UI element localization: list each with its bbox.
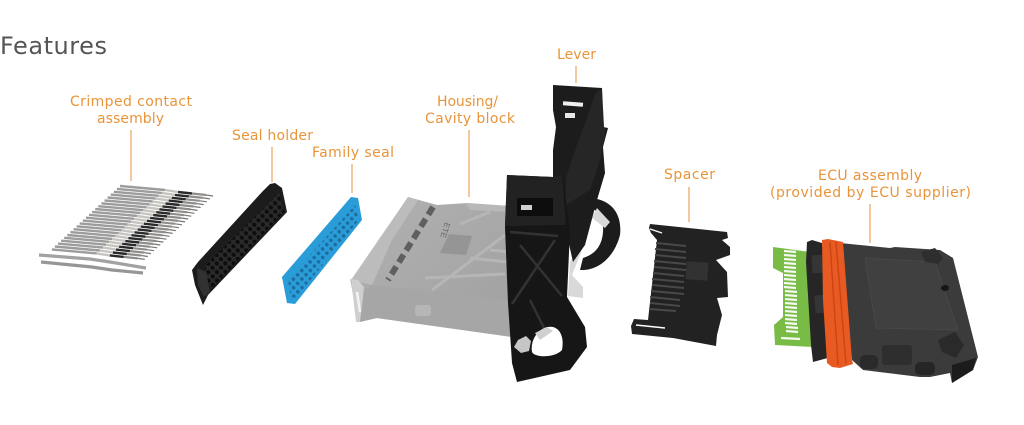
ecu orange seal xyxy=(822,239,853,368)
label: crimped contact assembly: Crimped contact xyxy=(70,94,192,110)
label: housing / cavity block: Housing/ xyxy=(437,94,498,110)
ecu collar xyxy=(806,240,835,362)
label: ecu assembly: ECU assembly xyxy=(818,168,922,184)
lever front plate xyxy=(505,175,587,382)
label: spacer xyxy=(664,167,715,222)
label: lever xyxy=(557,47,596,83)
label: housing / cavity block: Cavity block xyxy=(425,111,516,127)
lever metal latch xyxy=(568,208,610,298)
label: crimped contact assembly: assembly xyxy=(97,111,164,127)
label: lever: Lever xyxy=(557,47,596,63)
label: crimped contact assembly xyxy=(70,94,192,181)
component: housing / cavity block xyxy=(350,197,512,337)
component: housing / cavity block: ETE xyxy=(438,221,452,239)
label: seal holder xyxy=(232,128,313,182)
label: family seal xyxy=(312,145,394,193)
component: seal holder xyxy=(192,183,287,305)
component: crimped contact assembly xyxy=(39,186,213,273)
label: seal holder: Seal holder xyxy=(232,128,313,144)
label: housing / cavity block xyxy=(425,94,516,197)
label: family seal: Family seal xyxy=(312,145,394,161)
label: ecu assembly xyxy=(770,168,971,243)
label: spacer: Spacer xyxy=(664,167,715,183)
lever upper ring xyxy=(580,199,620,270)
ecu body xyxy=(840,243,978,383)
component: ecu assembly xyxy=(773,239,978,383)
title: Features xyxy=(0,32,107,60)
lever upper arm xyxy=(553,85,608,262)
ecu pcb xyxy=(773,247,813,347)
lever lower ring opening xyxy=(532,327,563,356)
component: family seal xyxy=(282,197,362,304)
label: ecu assembly: (provided by ECU supplier) xyxy=(770,185,971,201)
component: spacer xyxy=(631,224,730,346)
component: lever xyxy=(505,85,620,382)
